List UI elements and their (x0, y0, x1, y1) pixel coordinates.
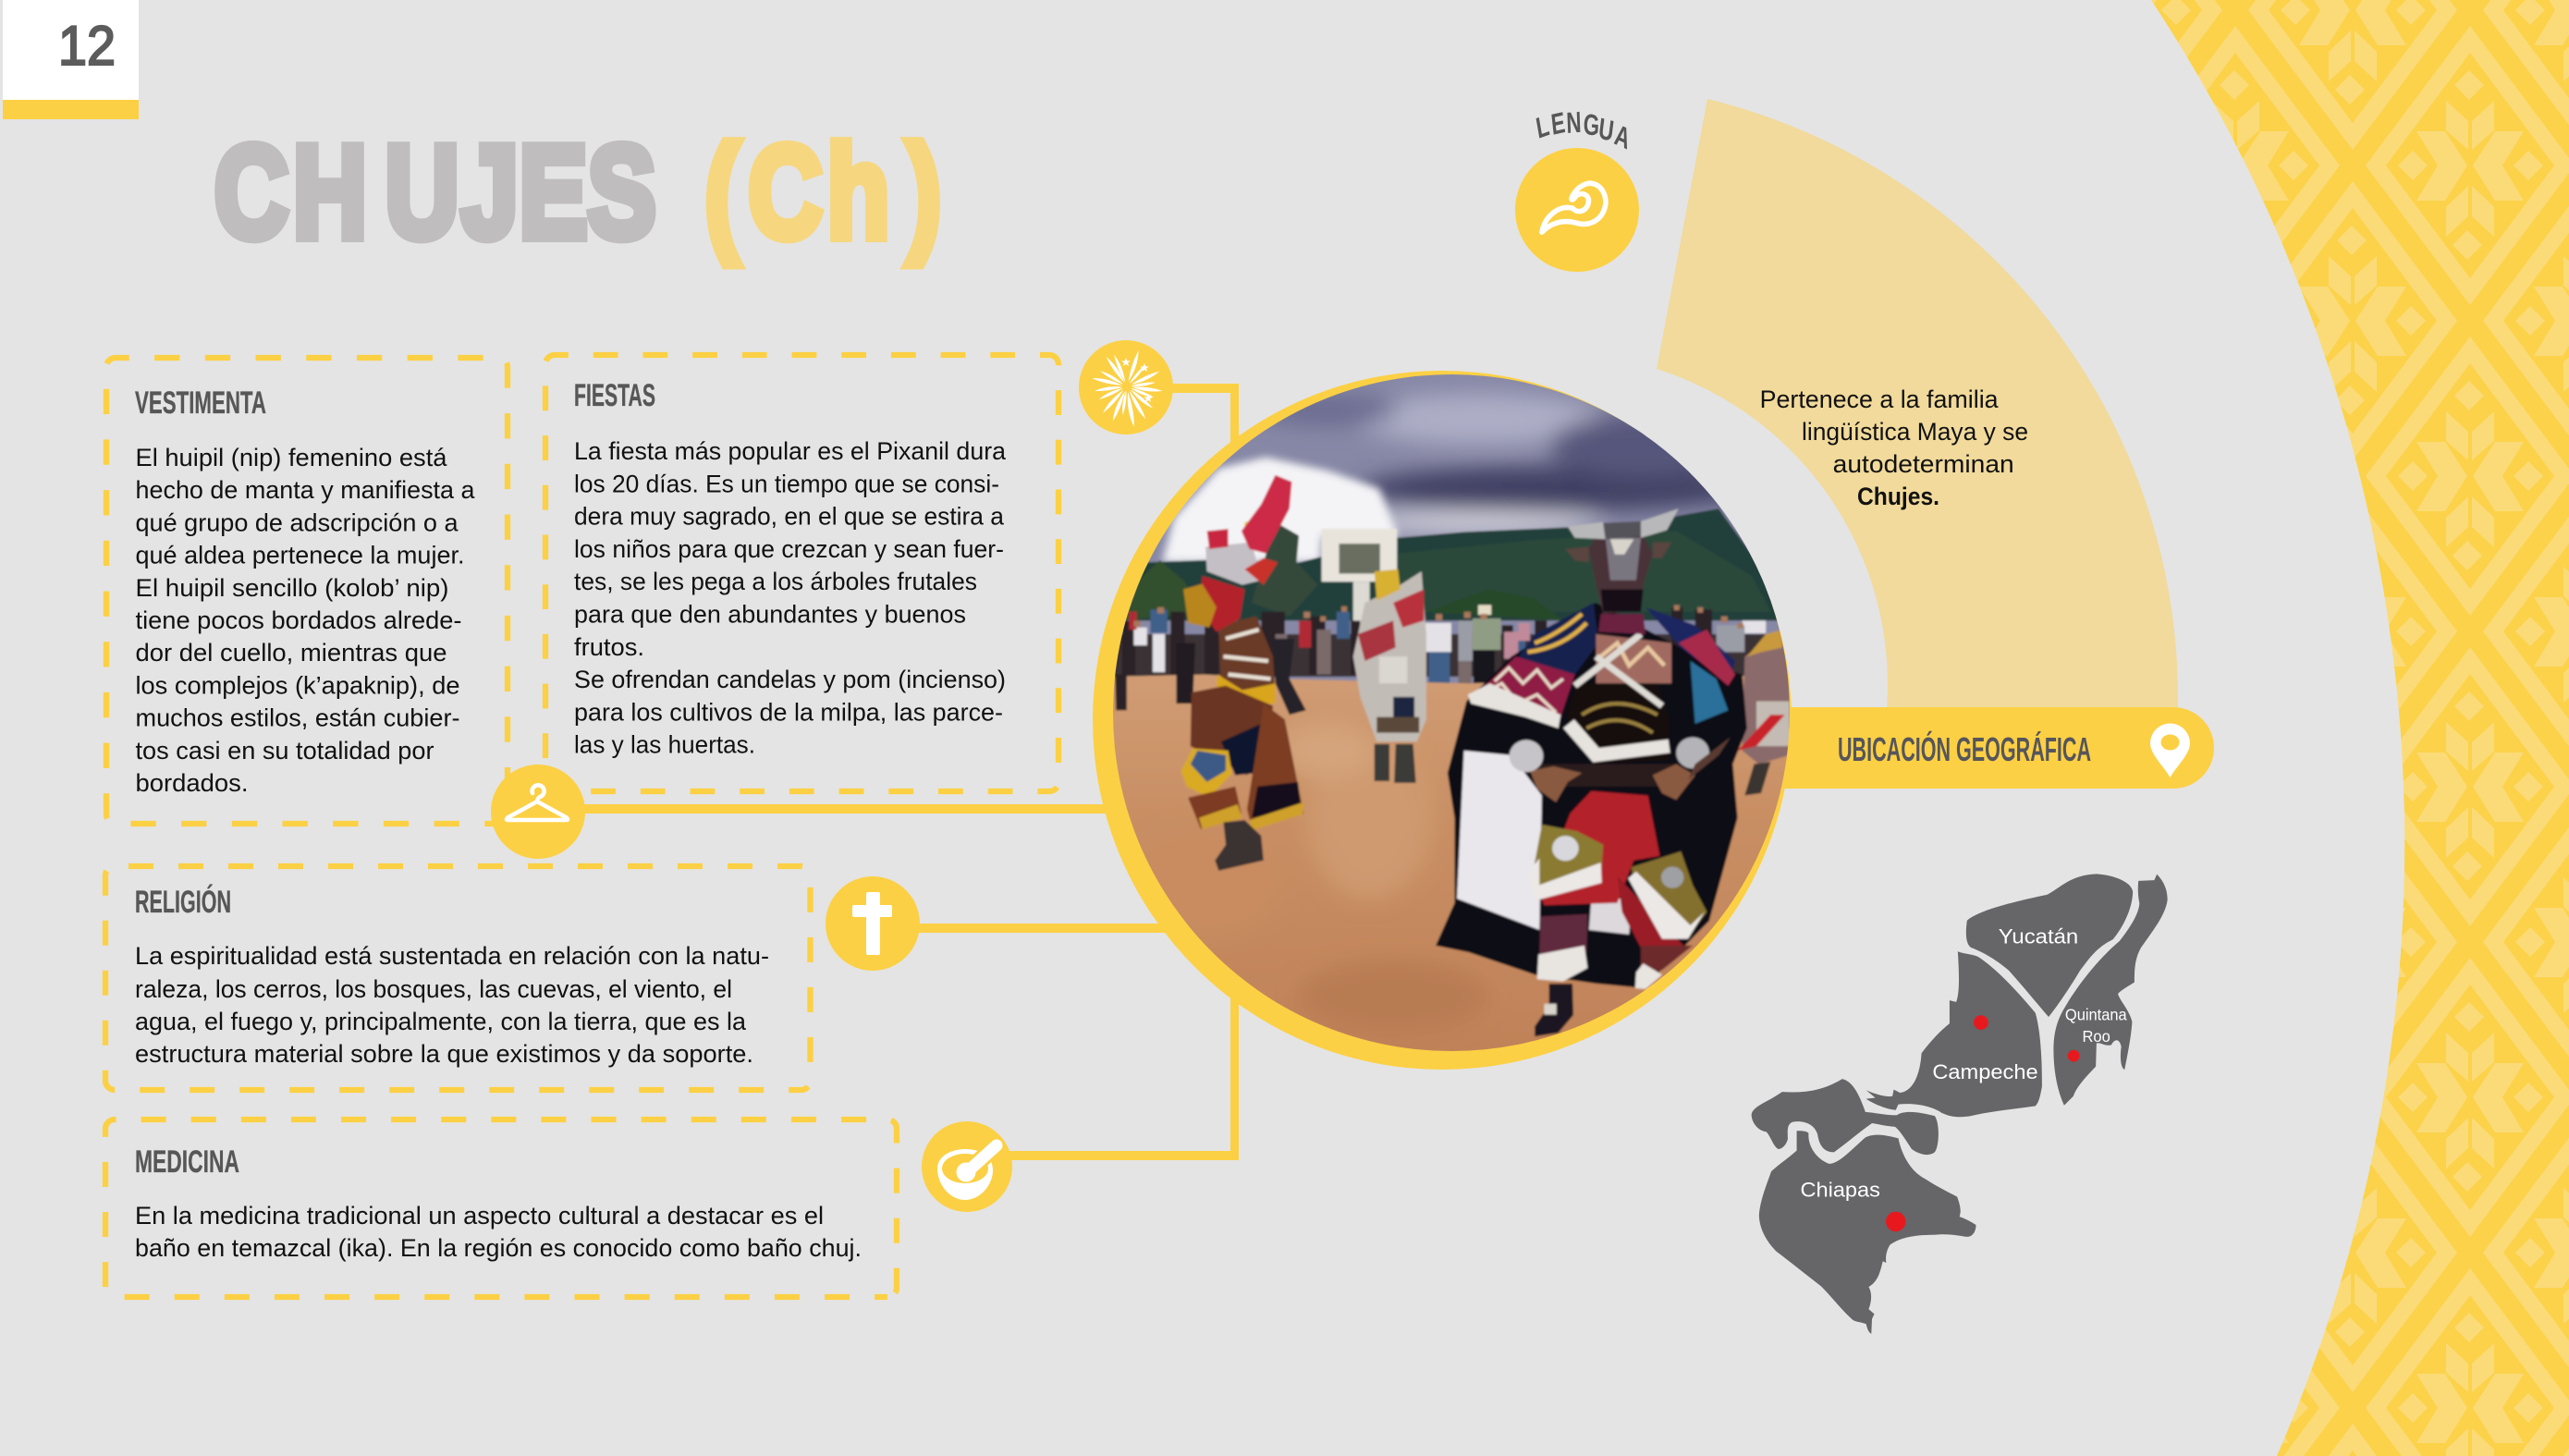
icon: lengua speech swirl (1515, 148, 1639, 272)
right small dancer (1738, 630, 1790, 795)
icon: mortar and pestle (922, 1121, 1012, 1212)
page number tab (3, 0, 139, 119)
heading: vestimenta: VESTIMENTA (135, 385, 266, 421)
connector lines from icons to photo (538, 384, 1239, 1160)
sky (1122, 374, 1790, 728)
text block: fiestas: para que den abundantes y buenos (574, 601, 966, 629)
region: Quintana Roo (2053, 875, 2168, 1106)
region: Tabasco (1752, 1079, 1939, 1155)
title: (Ch) (705, 118, 941, 265)
left figure (1115, 475, 1306, 871)
bull legs (1539, 914, 1587, 955)
text block: vestimenta: los complejos (k’apaknip), de (135, 671, 460, 699)
text block: fiestas: los niños para que crezcan y sean fuer- (574, 535, 1004, 563)
map labels: Roo (2082, 1027, 2110, 1046)
panel: medicina (105, 1120, 897, 1297)
crowd (1115, 603, 1768, 684)
title (214, 118, 941, 265)
banner: ubicacion geografica (1756, 707, 2214, 789)
panel: lengua fan (1657, 99, 2178, 708)
text block: religion: La espiritualidad está sustentada en relación con la natu- (135, 942, 769, 970)
text block: fiestas: las y las huertas. (574, 731, 755, 759)
text block: vestimenta: dor del cuello, mientras que (135, 639, 447, 667)
bull belt hands (1539, 765, 1676, 787)
region: Chiapas (1759, 1131, 1976, 1334)
icon: hanger (491, 765, 585, 859)
text block: medicina (135, 1202, 862, 1262)
text block: fiestas: para los cultivos de la milpa, las parce- (574, 698, 1003, 726)
text block: medicina: En la medicina tradicional un aspecto cultural a destacar es el (135, 1202, 824, 1230)
text block: lengua: lingüística Maya y se (1802, 418, 2028, 446)
banner: ubicacion geografica: UBICACIÓN GEOGRÁFICA (1838, 729, 2091, 768)
map labels: Chiapas (1800, 1179, 1880, 1202)
heading: fiestas: FIESTAS (574, 378, 655, 413)
heading: religion: RELIGIÓN (135, 885, 231, 920)
text block: fiestas: los 20 días. Es un tiempo que se consi- (574, 470, 999, 497)
text block: religion (135, 942, 769, 1068)
text block: fiestas: frutos. (574, 633, 644, 661)
text block: vestimenta: El huipil sencillo (kolob’ nip) (135, 574, 449, 602)
panel: fiestas (545, 355, 1058, 791)
panel: religion (105, 866, 810, 1090)
map labels: Quintana (2065, 1006, 2127, 1024)
text block: fiestas: tes, se les pega a los árboles frutales (574, 568, 977, 595)
icon: fireworks (1079, 340, 1173, 434)
bull chest (1596, 634, 1671, 683)
bull knee pieces (1535, 825, 1603, 894)
text block: lengua: Pertenece a la familia (1760, 385, 1999, 413)
middle figure (1353, 569, 1426, 783)
mountains (1129, 508, 1790, 620)
text block: vestimenta: bordados. (135, 769, 248, 797)
text block: vestimenta: muchos estilos, están cubier- (135, 704, 460, 732)
map labels: Yucatán (1999, 925, 2078, 948)
bull red pants (1539, 791, 1659, 905)
backboard (1322, 529, 1397, 581)
markers: red dots (1886, 1015, 2080, 1231)
text block: vestimenta (135, 444, 475, 797)
text block: lengua: Chujes. (1857, 483, 1939, 510)
text block: religion: raleza, los cerros, los bosques, las cuevas, el viento, el (135, 975, 732, 1003)
text block: vestimenta: El huipil (nip) femenino está (135, 444, 447, 471)
page number tab: 12 (58, 15, 116, 77)
bull shoulders (1516, 603, 1598, 675)
text block: religion: agua, el fuego y, principalmente, con la tierra, que es la (135, 1008, 746, 1035)
photo ring (1093, 371, 1792, 1070)
text block: fiestas (574, 437, 1006, 759)
region: Yucatan (1966, 874, 2133, 1017)
heading: medicina: MEDICINA (135, 1144, 239, 1180)
text block: vestimenta: tiene pocos bordados alrede- (135, 606, 462, 634)
text block: fiestas: dera muy sagrado, en el que se estira a (574, 503, 1004, 531)
bull figure cape (1436, 603, 1747, 988)
region: Campeche (1866, 951, 2042, 1117)
text block: fiestas: Se ofrendan candelas y pom (incienso) (574, 666, 1006, 693)
map labels: Campeche (1932, 1060, 2038, 1083)
text block: vestimenta: tos casi en su totalidad por (135, 737, 434, 765)
text block: medicina: baño en temazcal (ika). En la región es conocido como baño chuj. (135, 1234, 862, 1262)
label: lengua: LENGUA (1534, 105, 1633, 155)
text block: vestimenta: qué grupo de adscripción o a (135, 508, 459, 536)
decorative woven pattern band (2151, 0, 2569, 1456)
text block: vestimenta: hecho de manta y manifiesta a (135, 476, 475, 504)
photo: dancers in bull costumes (1113, 374, 1790, 1051)
bull head (1589, 535, 1653, 614)
icon: cross (826, 876, 920, 971)
map labels (1800, 925, 2127, 1202)
text block: fiestas: La fiesta más popular es el Pixanil dura (574, 437, 1006, 465)
text block: lengua (1760, 385, 2028, 510)
text block: lengua: autodeterminan (1833, 450, 2014, 478)
map: southern Mexico states (1752, 874, 2168, 1334)
ground (1110, 675, 1790, 1069)
text block: vestimenta: qué aldea pertenece la mujer. (135, 542, 464, 569)
text block: religion: estructura material sobre la que existimos y da soporte. (135, 1040, 753, 1068)
panel: vestimenta (106, 358, 508, 824)
title: CHUJES (214, 118, 656, 265)
icon: location pin (2150, 723, 2190, 777)
